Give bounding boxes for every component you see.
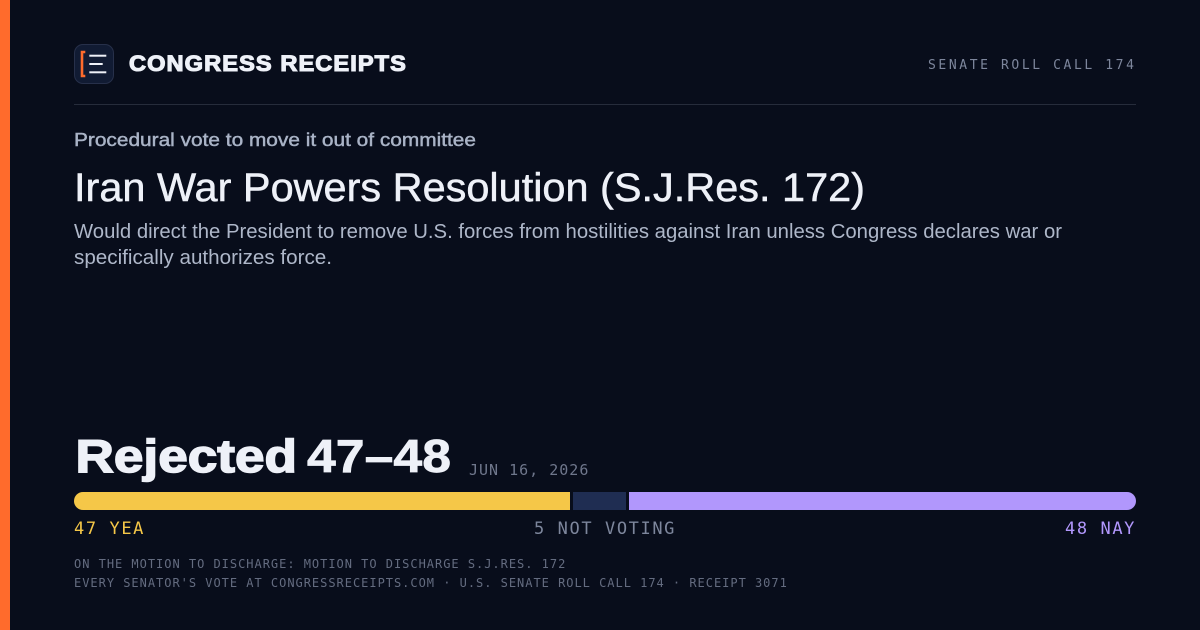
yea label: 47 YEA: [74, 519, 145, 539]
header: [74, 44, 1137, 84]
description: [74, 221, 1062, 269]
brand name: CONGRESS RECEIPTS: [129, 51, 407, 76]
result headline: 47–48: [307, 430, 451, 482]
not voting label: 5 NOT VOTING: [534, 519, 676, 539]
title: Iran War Powers Resolution (S.J.Res. 172): [74, 166, 865, 210]
nay label: 48 NAY: [1065, 519, 1136, 539]
kicker: Procedural vote to move it out of committee: [74, 129, 476, 150]
footer: [74, 557, 788, 590]
result headline: [76, 430, 451, 482]
accent stripe: [0, 0, 10, 630]
nay segment: [629, 492, 1136, 510]
yea segment: [74, 492, 570, 510]
description: Would direct the President to remove U.S. forces from hostilities against Iran unless Congress declares war or: [74, 221, 1062, 243]
date: JUN 16, 2026: [469, 461, 589, 479]
footer: EVERY SENATOR'S VOTE AT CONGRESSRECEIPTS.COM · U.S. SENATE ROLL CALL 174 · RECEIPT 3071: [74, 576, 788, 590]
icon: brand logo: [74, 44, 114, 84]
result headline: Rejected: [76, 430, 297, 482]
footer: ON THE MOTION TO DISCHARGE: MOTION TO DISCHARGE S.J.RES. 172: [74, 557, 566, 571]
description: specifically authorizes force.: [74, 247, 332, 269]
roll call label: SENATE ROLL CALL 174: [928, 58, 1137, 73]
vote bar: [74, 492, 1136, 510]
not voting segment: [573, 492, 626, 510]
